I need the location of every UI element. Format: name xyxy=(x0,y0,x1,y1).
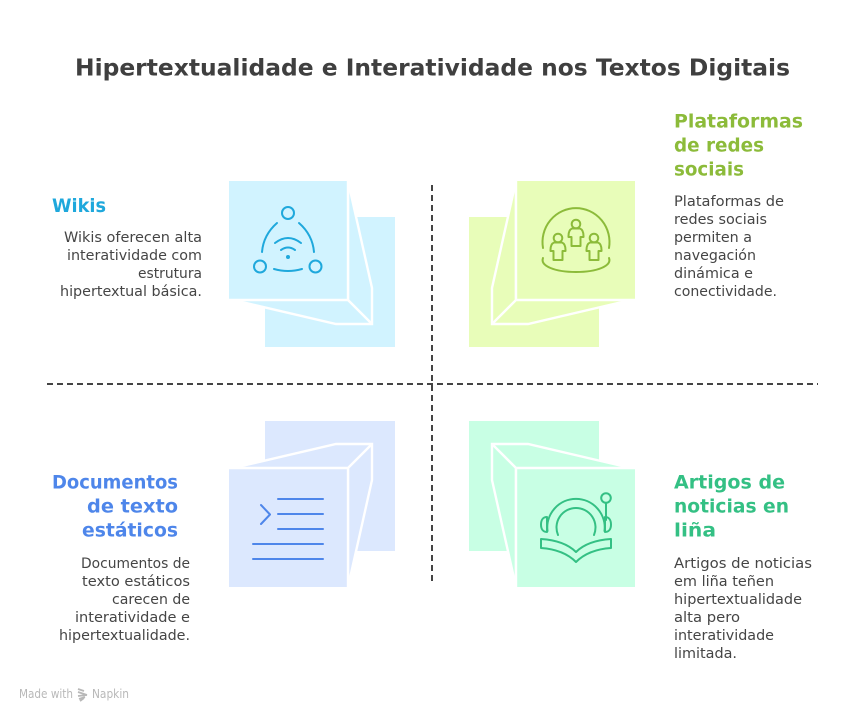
icon: people under dome xyxy=(542,208,610,272)
plataformas heading: sociais xyxy=(674,158,744,180)
wikis heading: Wikis xyxy=(52,195,106,217)
panel: documentos de texto estáticos xyxy=(52,421,395,644)
plataformas heading: de redes xyxy=(674,134,764,156)
wikis folded card xyxy=(229,181,395,347)
plataformas description: redes sociais xyxy=(674,212,767,228)
wikis description: estrutura xyxy=(138,266,202,282)
documentos description: texto estáticos xyxy=(82,574,190,590)
documentos heading: estáticos xyxy=(82,520,178,542)
documentos description: interatividade e xyxy=(75,610,190,626)
footer: made with napkin xyxy=(19,687,129,701)
artigos description: hipertextualidade xyxy=(674,592,802,608)
artigos heading: Artigos de xyxy=(674,472,785,494)
plataformas description: Plataformas de xyxy=(674,194,784,210)
panel: wikis xyxy=(52,181,395,347)
title: Hipertextualidade e Interatividade nos Textos Digitais xyxy=(75,56,790,82)
documentos heading: de texto xyxy=(87,496,178,518)
documentos description: carecen de xyxy=(112,592,190,608)
icon: headset and open book xyxy=(541,493,611,562)
icon: napkin logo xyxy=(78,689,87,701)
documentos description: Documentos de xyxy=(81,556,190,572)
plataformas heading: Plataformas xyxy=(674,110,803,132)
documentos heading xyxy=(52,472,178,542)
documentos description: hipertextualidade. xyxy=(59,628,190,644)
icon: text document xyxy=(253,499,323,559)
icon: wikis network xyxy=(254,207,322,272)
plataformas description: conectividade. xyxy=(674,284,777,300)
plataformas folded card xyxy=(469,181,635,347)
artigos description: em liña teñen xyxy=(674,574,774,590)
documentos folded card xyxy=(229,421,395,587)
wikis description: hipertextual básica. xyxy=(60,284,202,300)
plataformas description: navegación xyxy=(674,248,756,264)
plataformas description: dinámica e xyxy=(674,266,753,282)
artigos description: alta pero xyxy=(674,610,740,626)
footer: made with napkin: Made with xyxy=(19,687,73,701)
wikis description: interatividade com xyxy=(67,248,202,264)
artigos description xyxy=(674,556,812,662)
plataformas description xyxy=(674,194,784,300)
quadrant axes xyxy=(47,185,818,582)
artigos heading: noticias en xyxy=(674,496,789,518)
plataformas heading xyxy=(674,110,803,180)
artigos heading: liña xyxy=(674,520,716,542)
wikis description: Wikis oferecen alta xyxy=(64,230,202,246)
artigos description: limitada. xyxy=(674,646,737,662)
artigos heading xyxy=(674,472,789,542)
wikis description xyxy=(60,230,202,300)
documentos heading: Documentos xyxy=(52,472,178,494)
artigos description: interatividade xyxy=(674,628,774,644)
panel: plataformas de redes sociais xyxy=(469,110,803,347)
plataformas description: permiten a xyxy=(674,230,752,246)
documentos description xyxy=(59,556,190,644)
artigos folded card xyxy=(469,421,635,587)
panel: artigos de noticias en liña xyxy=(469,421,812,662)
footer: made with napkin: Napkin xyxy=(92,687,129,701)
artigos description: Artigos de noticias xyxy=(674,556,812,572)
